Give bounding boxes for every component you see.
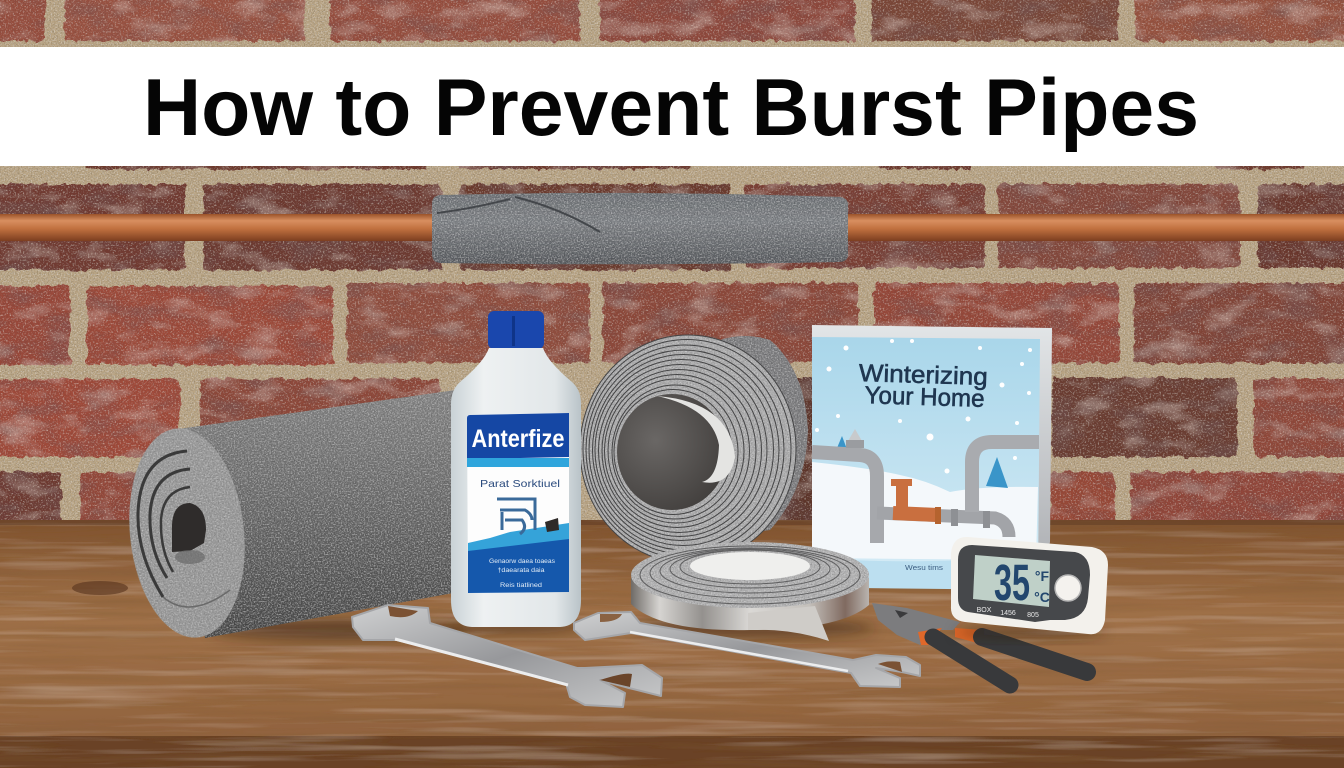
icon: silver foil tape roll (631, 542, 875, 641)
brick wall (0, 0, 1344, 530)
icon: digital thermometer (951, 537, 1108, 638)
thermometer reading: 35 (994, 554, 1030, 611)
booklet title: Your Home (864, 382, 985, 413)
title banner: How to Prevent Burst Pipes (143, 63, 1199, 153)
icon: antifreeze bottle: Genaorw daea toaeas (489, 558, 556, 565)
booklet title: Winterizing (858, 360, 988, 391)
icon: small wrench (574, 612, 920, 687)
icon: antifreeze bottle (444, 311, 588, 634)
label: product name: Anterfize (472, 425, 565, 453)
icon: digital thermometer: °F (1035, 568, 1050, 584)
icon: winterizing booklet: Wesu tims (905, 565, 944, 572)
icon: digital thermometer: 1456 (1000, 610, 1016, 617)
icon: digital thermometer: BOX (977, 607, 992, 614)
icon: antifreeze bottle: †daearata daia (498, 567, 545, 574)
copper pipe with foam insulation sleeve (0, 193, 1344, 264)
booklet title (858, 360, 988, 413)
wooden table (0, 520, 1344, 768)
icon: winterizing booklet (811, 325, 1052, 590)
icon: pipe insulation foam roll (119, 388, 470, 643)
icon: large wrench (352, 605, 662, 707)
icon: antifreeze bottle: Parat Sorktiuel (480, 478, 560, 490)
title banner (0, 47, 1344, 166)
icon: antifreeze bottle: Reis tiatlined (500, 582, 542, 589)
icon: foil insulation roll (580, 335, 808, 563)
icon: pliers (872, 603, 1087, 685)
icon: digital thermometer: 805 (1027, 612, 1039, 619)
icon: digital thermometer: °C (1034, 589, 1050, 605)
